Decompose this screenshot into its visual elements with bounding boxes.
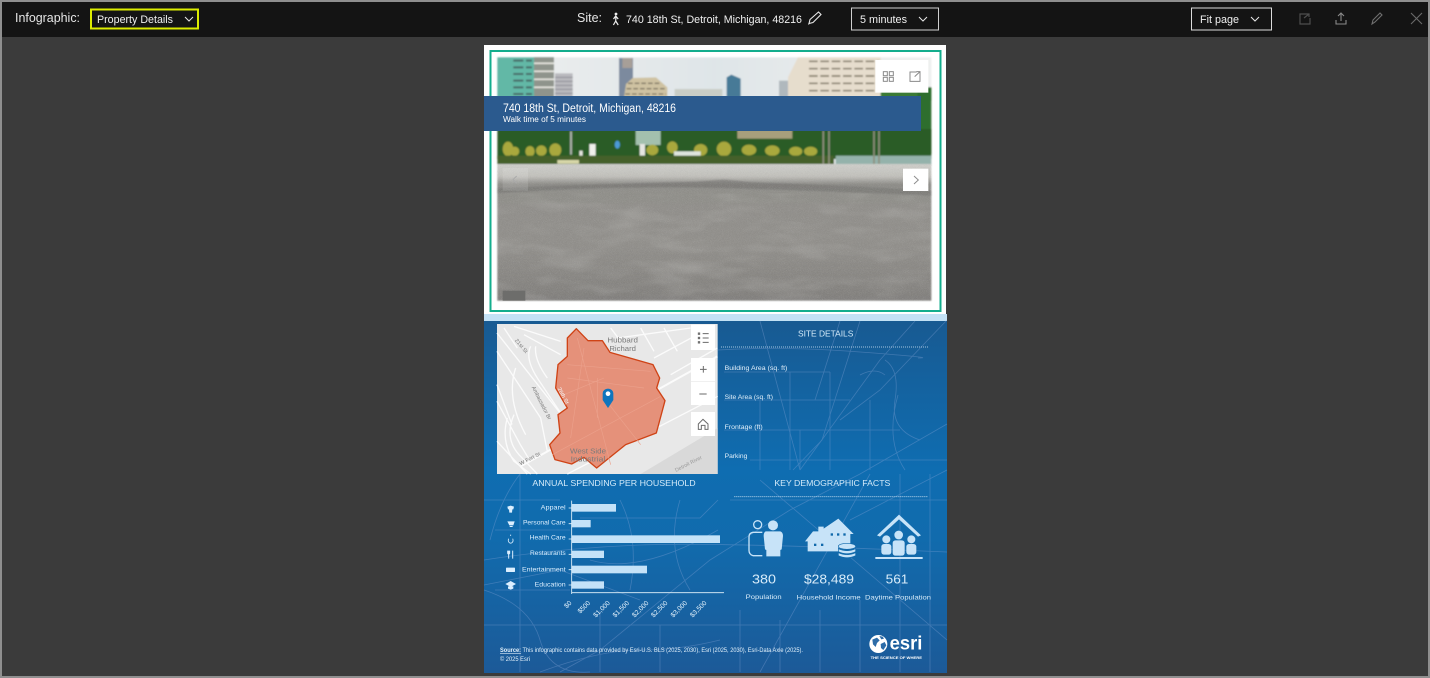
chart axis labels: $0: [563, 600, 574, 610]
site label: Site:: [577, 11, 602, 25]
dropdown: 5 minutes: [852, 8, 938, 30]
map labels: 21st St: [513, 338, 529, 355]
esri logo: THE SCIENCE OF WHERE: [871, 656, 923, 660]
walk time polygon: [550, 329, 665, 468]
chart axis labels: $3,000: [670, 600, 689, 619]
panel: blue data panel: [484, 320, 947, 673]
spending category icons: [505, 506, 516, 590]
icon: walking person: [613, 13, 618, 25]
dropdown: fit page: Fit page: [1200, 14, 1239, 26]
chart axis labels: $500: [577, 600, 592, 615]
esri logo: esri: [890, 634, 922, 655]
icon: share: [1300, 14, 1310, 24]
strip between panels: [484, 314, 947, 321]
chart labels: Education: [535, 581, 566, 588]
site detail labels: Frontage (ft): [725, 424, 763, 431]
stat: population: [746, 572, 782, 601]
map pin: [603, 389, 613, 408]
map: [497, 324, 718, 474]
icon: population: [749, 520, 783, 556]
icon: household income: [805, 519, 856, 558]
icon: close: [1411, 13, 1422, 24]
stat: daytime population: 561: [886, 572, 908, 587]
map labels: Ambassador Br: [530, 386, 552, 421]
map labels: W Fort St: [519, 451, 542, 467]
streets inside polygon: [552, 338, 661, 465]
esri logo: [869, 634, 923, 660]
stat: household income: Household Income: [797, 595, 861, 602]
map labels: Detroit River: [674, 455, 703, 474]
chart labels: Health Care: [530, 535, 566, 542]
map labels: [513, 336, 703, 474]
dropdown: property details: Property Details: [97, 14, 173, 26]
chart labels: Entertainment: [522, 566, 566, 573]
icon: export: [1336, 13, 1346, 24]
chart axis labels: [563, 600, 709, 619]
heading: annual spending: ANNUAL SPENDING PER HOUSEHOLD: [532, 478, 696, 488]
address banner: [484, 96, 921, 131]
property photo: [497, 57, 931, 301]
map labels: Hubbard: [607, 336, 638, 345]
address banner: 740 18th St, Detroit, Michigan, 48216: [503, 103, 676, 115]
map labels: West Side: [570, 446, 606, 455]
source note: Source: This infographic contains data provided by Esri-U.S. BLS (2025, 2030), Esri (2025, 2030), Esri-Data Axle (2025).: [500, 648, 803, 654]
street map texture: [484, 320, 947, 672]
site detail labels: Building Area (sq. ft): [725, 365, 787, 372]
dropdown: property details: [91, 10, 198, 28]
section: site details: [721, 328, 928, 460]
heading: site details: SITE DETAILS: [798, 328, 854, 338]
dropdown: 5 minutes: 5 minutes: [860, 14, 907, 26]
heading: key demographic facts: KEY DEMOGRAPHIC FACTS: [774, 478, 891, 488]
address banner: Walk time of 5 minutes: [503, 115, 586, 124]
section: annual spending chart: [505, 478, 724, 619]
site detail labels: [725, 365, 787, 460]
icon: pencil: [1372, 13, 1382, 24]
toolbar: [2, 2, 1428, 37]
map labels: Industrial: [571, 455, 606, 464]
chart axis labels: $1,000: [592, 600, 612, 619]
map home button: [691, 412, 715, 436]
chart axis labels: $3,500: [689, 600, 709, 619]
site detail labels: Parking: [725, 453, 748, 460]
source note: [500, 648, 803, 663]
stat: population: 380: [752, 572, 776, 587]
button: previous photo: [503, 168, 528, 191]
icon: daytime population: [875, 515, 923, 559]
chart axis labels: $2,000: [631, 600, 651, 619]
map labels: Richard: [609, 344, 636, 353]
site address: 740 18th St, Detroit, Michigan, 48216: [626, 14, 802, 26]
icon: edit pencil: [808, 12, 821, 24]
stat: household income: [797, 572, 861, 602]
stat: daytime population: Daytime Population: [865, 595, 932, 602]
bar chart: [569, 501, 724, 594]
map legend button: [691, 325, 715, 350]
map roads: [497, 326, 718, 474]
panel: property photo card: [484, 45, 946, 315]
button: next photo: [903, 169, 928, 191]
section: key demographic facts: [734, 478, 932, 660]
source note: © 2025 Esri: [500, 656, 530, 663]
dropdown: fit page: [1192, 8, 1272, 30]
stat: household income: $28,489: [804, 572, 854, 587]
stat: daytime population: [865, 572, 932, 602]
chart labels: [522, 505, 566, 588]
chart labels: Personal Care: [523, 519, 566, 526]
zoom controls: [691, 358, 715, 405]
stat: population: Population: [746, 594, 782, 601]
site detail labels: Site Area (sq. ft): [725, 394, 773, 401]
chart axis labels: $2,500: [650, 600, 670, 619]
button: gallery and expand: [875, 60, 928, 93]
chart labels: Restaurants: [530, 550, 566, 557]
chart labels: Apparel: [541, 505, 566, 512]
toolbar label: infographic: Infographic:: [15, 10, 80, 25]
map labels: 26th St: [556, 387, 569, 406]
chart axis labels: $1,500: [612, 600, 631, 619]
